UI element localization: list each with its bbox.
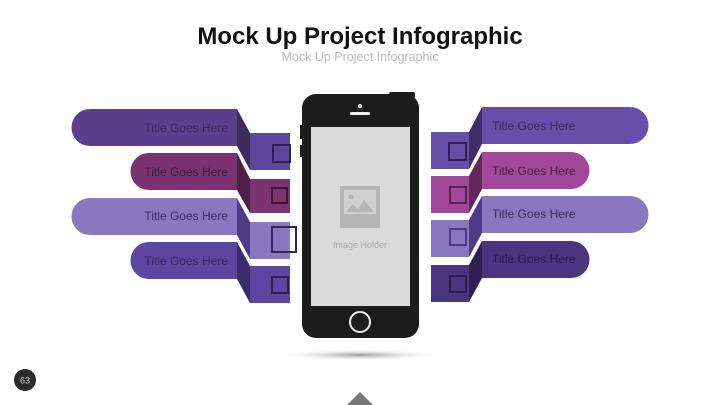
phone shadow bbox=[275, 349, 445, 361]
right tab 4: Title Goes Here bbox=[492, 252, 576, 266]
right tab 3: Title Goes Here bbox=[492, 207, 576, 221]
right tab 2 bbox=[431, 152, 590, 213]
left tab 3 bbox=[72, 198, 296, 259]
page number bbox=[14, 369, 36, 391]
left tab 4 bbox=[130, 242, 290, 303]
page number: 63 bbox=[20, 376, 30, 386]
right tab 2: Title Goes Here bbox=[492, 164, 576, 178]
right tab 1 bbox=[431, 107, 648, 169]
left tab 2: Title Goes Here bbox=[144, 165, 228, 179]
image holder label: Image Holder bbox=[333, 240, 387, 250]
left tab 1 bbox=[72, 109, 290, 170]
subtitle: Mock Up Project Infographic bbox=[281, 50, 439, 64]
phone bbox=[300, 92, 419, 338]
right tab 1: Title Goes Here bbox=[492, 119, 576, 133]
right tab 4 bbox=[431, 241, 590, 302]
left tab 3: Title Goes Here bbox=[144, 209, 228, 223]
left tab 4: Title Goes Here bbox=[144, 254, 228, 268]
left tab 2 bbox=[130, 153, 290, 213]
icon: image placeholder bbox=[340, 186, 380, 228]
right tab 3 bbox=[431, 196, 648, 257]
nav arrow bbox=[347, 392, 373, 405]
title: Mock Up Project Infographic bbox=[197, 23, 523, 50]
left tab 1: Title Goes Here bbox=[144, 121, 228, 135]
